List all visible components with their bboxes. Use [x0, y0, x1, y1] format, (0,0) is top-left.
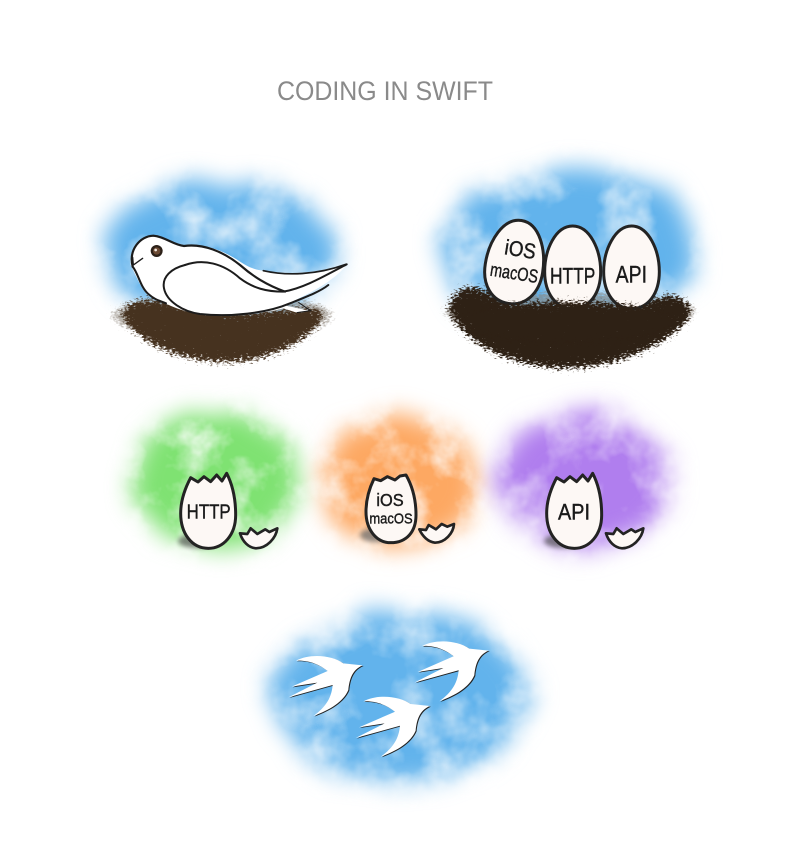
- swift: bottom: [356, 697, 431, 757]
- egg: HTTP: [545, 226, 601, 309]
- eggs: [480, 216, 659, 309]
- egg shadow: [178, 534, 218, 548]
- cloud: orange: [321, 417, 477, 547]
- bird sitting on nest: [130, 236, 347, 315]
- panel: hatching API egg: [497, 410, 667, 550]
- panel: swift nesting: [106, 180, 347, 364]
- eggshell fragment: [606, 528, 643, 548]
- broken egg: API: [547, 473, 602, 548]
- egg: API: [604, 226, 659, 309]
- title: CODING IN SWIFT: [277, 76, 493, 106]
- eggshell fragment: [419, 524, 454, 543]
- nest back: [440, 285, 700, 370]
- egg shadow: [544, 534, 584, 548]
- egg: HTTP: HTTP: [550, 263, 595, 288]
- broken egg: iOS macOS: [366, 475, 416, 543]
- icon: bird eye: [151, 245, 163, 257]
- eggshell fragment: [240, 528, 277, 548]
- broken egg: HTTP: HTTP: [187, 500, 231, 523]
- cloud: green: [132, 413, 300, 547]
- swift: left: [288, 656, 364, 717]
- broken egg: HTTP: [181, 473, 236, 548]
- sky cloud: blue: [106, 180, 338, 324]
- egg: iOS macOS: macOS: [489, 259, 540, 287]
- nest front grass: [456, 300, 680, 344]
- nest: [108, 292, 336, 364]
- sky cloud: blue: [440, 172, 696, 328]
- swift: right: [414, 641, 490, 702]
- sky cloud: blue: [272, 613, 528, 781]
- panel: hatching HTTP egg: [132, 413, 300, 548]
- egg: API: API: [616, 262, 647, 289]
- cloud: purple: [497, 410, 667, 550]
- panel: swifts flying: [272, 613, 528, 781]
- broken egg: iOS macOS: iOS: [376, 490, 404, 510]
- broken egg: iOS macOS: macOS: [369, 512, 413, 528]
- broken egg: API: API: [558, 499, 590, 524]
- icon: bird beak: [133, 257, 143, 265]
- egg: iOS macOS: [480, 216, 550, 308]
- panel: three eggs in nest: [440, 172, 700, 370]
- egg: iOS macOS: iOS: [503, 235, 538, 264]
- panel: hatching iOS macOS egg: [321, 417, 477, 547]
- egg shadow: [360, 528, 392, 542]
